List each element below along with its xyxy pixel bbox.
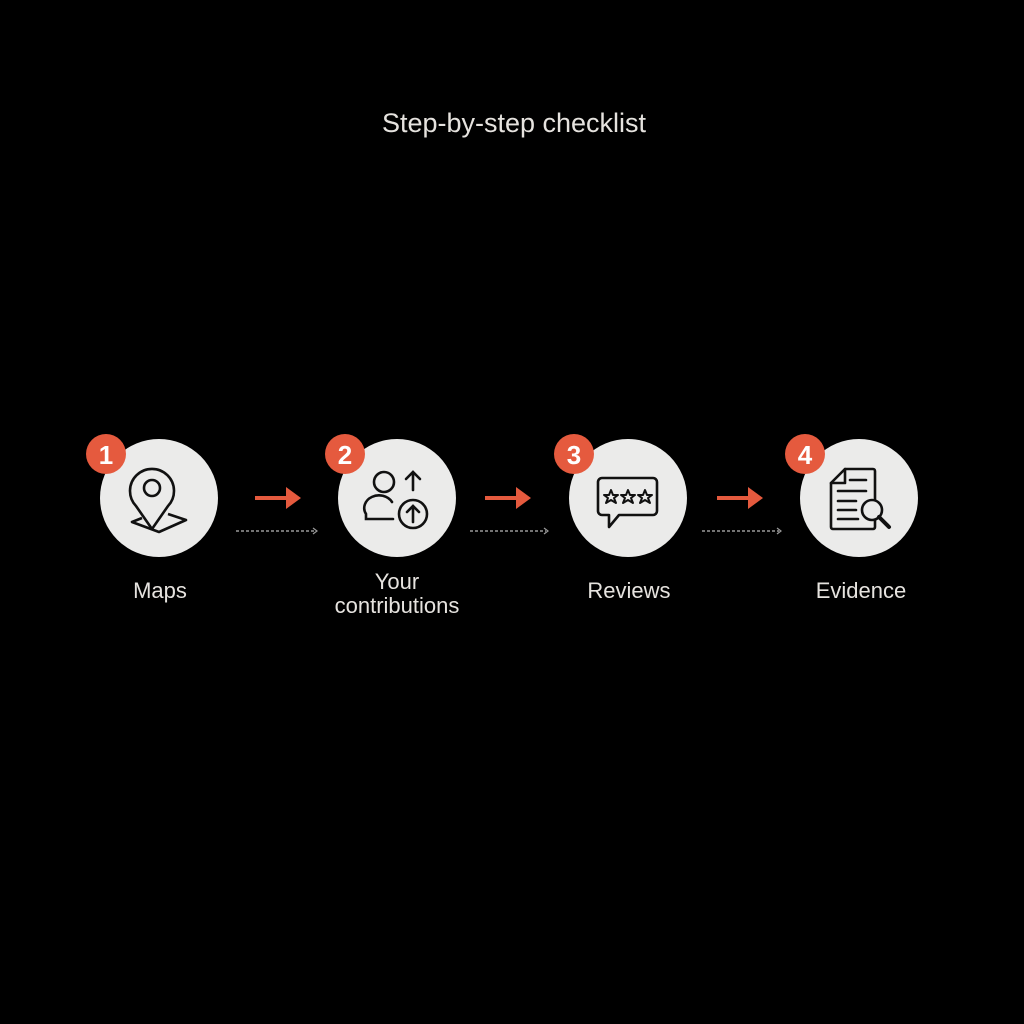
icon: document with magnifier — [831, 469, 889, 529]
title: Step-by-step checklist — [382, 108, 647, 138]
badge 2 — [325, 434, 365, 474]
badge 3 — [554, 434, 594, 474]
step 4: Evidence — [785, 434, 918, 603]
arrow 1 — [236, 487, 317, 534]
icon: person with upload arrows — [364, 472, 427, 528]
icon: map pin — [130, 469, 186, 532]
label: Reviews: Reviews — [587, 578, 671, 603]
step 1: Maps — [86, 434, 218, 603]
label: Maps: Maps — [133, 578, 187, 603]
step 2: Your contributions — [325, 434, 456, 594]
badge 1 — [86, 434, 126, 474]
label: Evidence: Evidence — [816, 578, 906, 603]
label: Your contributions: Your — [375, 569, 419, 594]
text: contributions — [335, 593, 459, 618]
badge 2: 2 — [338, 440, 352, 470]
badge 1: 1 — [99, 440, 113, 470]
icon: speech bubble with stars — [598, 478, 657, 527]
badge 4 — [785, 434, 825, 474]
badge 4: 4 — [798, 440, 813, 470]
arrow 2 — [470, 487, 548, 534]
badge 3: 3 — [567, 440, 581, 470]
arrow 3 — [702, 487, 781, 534]
step 3: Reviews — [554, 434, 687, 603]
